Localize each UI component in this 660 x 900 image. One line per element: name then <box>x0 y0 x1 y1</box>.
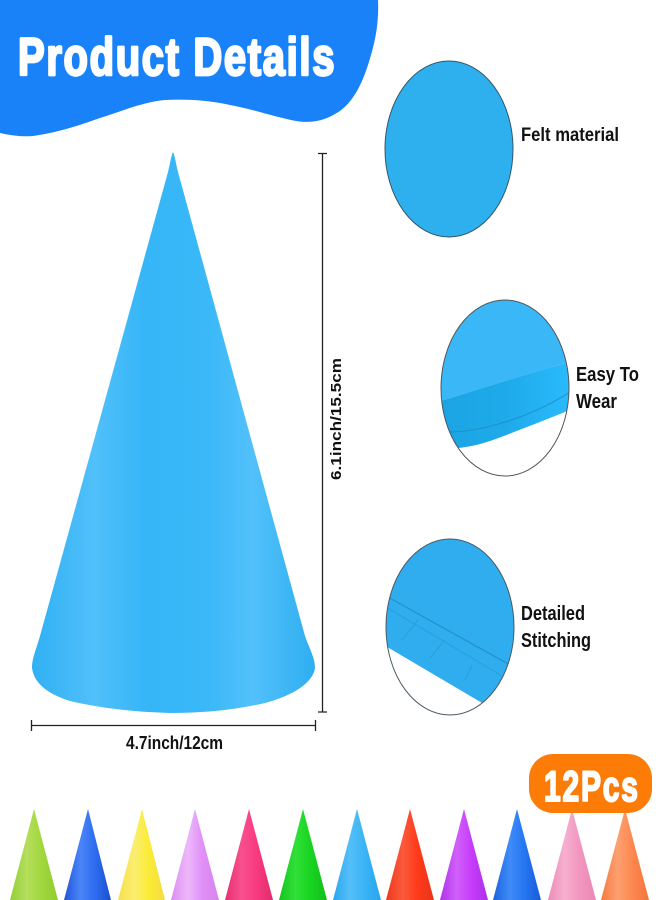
label: easy to wear <box>576 364 639 413</box>
detail circle: detailed stitching <box>385 538 515 722</box>
badge: 12Pcs <box>529 754 652 813</box>
height label: 6.1inch/15.5cm <box>328 358 345 480</box>
label: detailed stitching: Stitching <box>521 630 591 652</box>
label: detailed stitching: Detailed <box>521 603 585 625</box>
width dimension <box>32 720 316 753</box>
label: felt material: Felt material <box>521 125 619 146</box>
header blob with title <box>0 0 378 136</box>
height dimension <box>318 153 345 712</box>
label: detailed stitching <box>521 603 591 652</box>
detail circle: easy to wear <box>440 299 570 476</box>
width label: 4.7inch/12cm <box>126 733 223 753</box>
badge: 12Pcs: 12Pcs <box>544 763 640 810</box>
main blue cone <box>32 152 315 713</box>
detail circle: felt material <box>385 61 513 237</box>
row of 12 coloured cones <box>10 809 649 900</box>
label: easy to wear: Wear <box>576 391 617 413</box>
title: Product Details <box>18 28 336 86</box>
label: easy to wear: Easy To <box>576 364 639 386</box>
